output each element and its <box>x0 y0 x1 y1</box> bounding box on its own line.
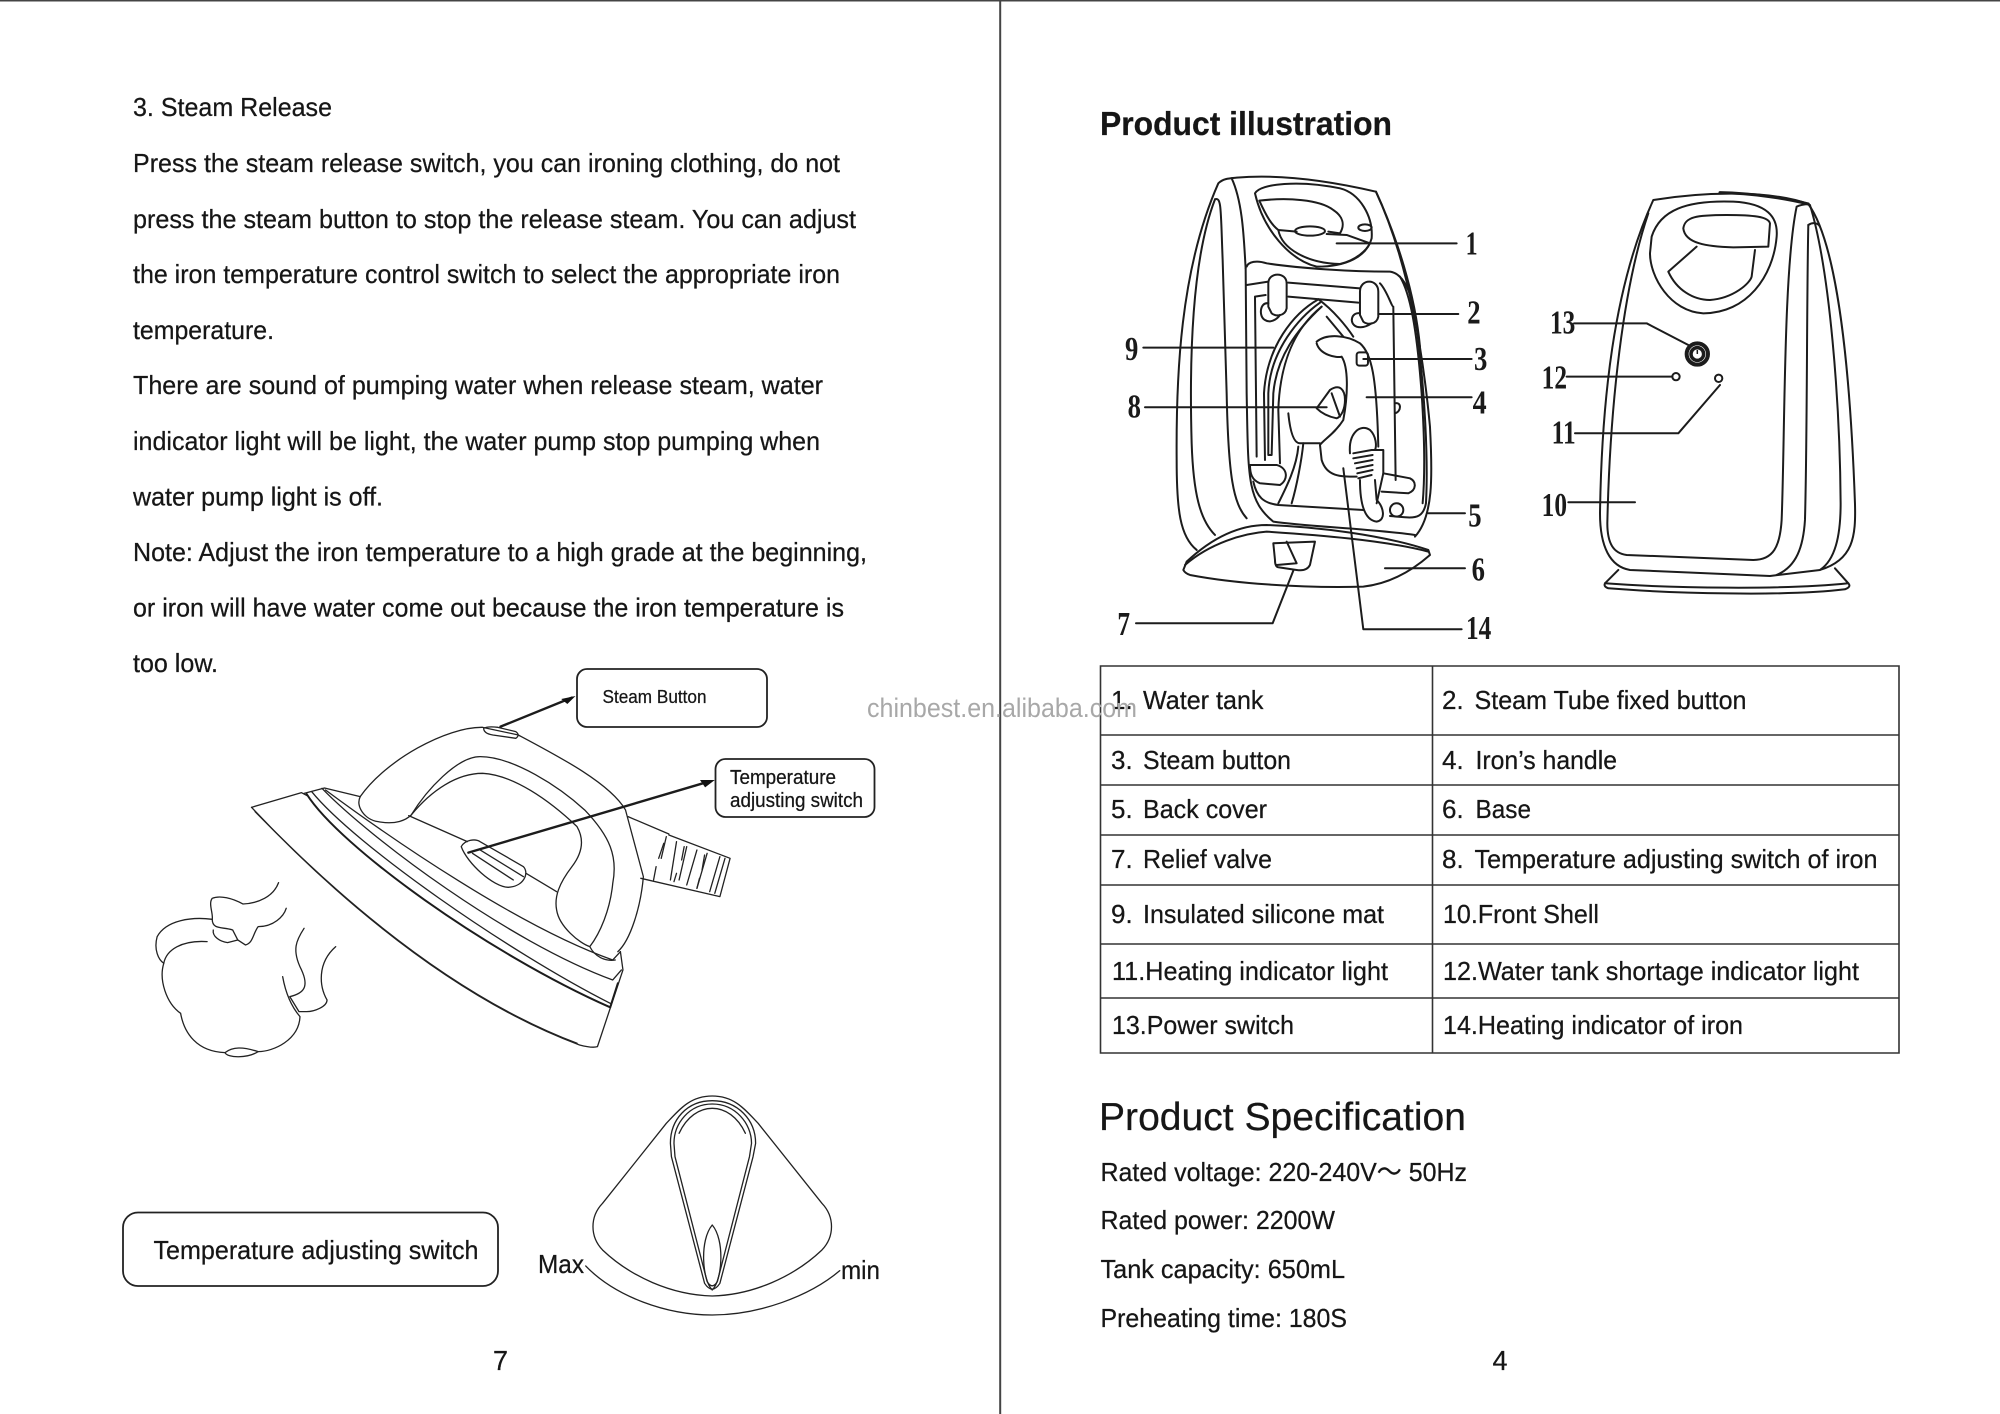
text block: steam release instructions: water pump light is off. <box>132 482 383 512</box>
table: parts list <box>1100 666 1899 1053</box>
table entries: Insulated silicone mat <box>1143 899 1385 929</box>
table entries: 2. <box>1442 685 1464 715</box>
leader lines <box>1567 323 1720 502</box>
table entries: Iron’s handle <box>1476 745 1617 775</box>
part numbers <box>1117 225 1492 647</box>
table entries: Steam Tube fixed button <box>1474 685 1746 715</box>
part numbers <box>1542 304 1576 524</box>
iron handle and body <box>359 727 643 960</box>
leader lines <box>1136 243 1472 629</box>
table entries: 11.Heating indicator light <box>1112 956 1389 986</box>
base and relief valve <box>1183 525 1430 587</box>
part numbers: 7 <box>1117 606 1130 643</box>
table entries: 13.Power switch <box>1112 1010 1294 1040</box>
part numbers: 1 <box>1466 225 1478 262</box>
main body shell <box>1177 177 1431 550</box>
page number 7: 7 <box>493 1345 508 1376</box>
illustration: steam station, front view <box>1542 193 1855 594</box>
part numbers: 3 <box>1474 341 1487 378</box>
illustration: steam station, inside view <box>1117 177 1492 647</box>
text block: specification values: Rated power: 2200W <box>1100 1205 1335 1235</box>
table entries: 14.Heating indicator of iron <box>1443 1010 1743 1040</box>
silicone mat and iron <box>1264 299 1383 522</box>
text block: steam release instructions: temperature. <box>133 315 274 345</box>
table entries: 3. <box>1111 745 1133 775</box>
heading: product illustration: Product illustration <box>1100 105 1392 142</box>
table entries <box>1111 685 1878 1040</box>
table entries: 8. <box>1442 844 1464 874</box>
heading: product specification: Product Specification <box>1099 1096 1466 1139</box>
max label: Max <box>538 1249 584 1279</box>
part numbers: 14 <box>1466 610 1492 647</box>
table entries: Relief valve <box>1143 844 1272 874</box>
table entries: Temperature adjusting switch of iron <box>1474 844 1878 874</box>
text block: steam release instructions: Press the steam release switch, you can ironing clothing, do not <box>133 148 841 178</box>
text block: steam release instructions: too low. <box>133 648 218 678</box>
part numbers: 5 <box>1468 498 1482 535</box>
watermark: chinbest.en.alibaba.com <box>867 693 1137 723</box>
text block: steam release instructions: Note: Adjust the iron temperature to a high grade at the beginning, <box>133 537 867 567</box>
part numbers: 13 <box>1550 304 1575 341</box>
part numbers: 4 <box>1473 384 1487 421</box>
dial drawing <box>586 1096 840 1315</box>
min label: min <box>841 1255 880 1285</box>
label box: temperature adjusting switch <box>123 1212 498 1286</box>
tube buttons and recess <box>1247 275 1415 517</box>
part numbers: 2 <box>1467 294 1481 331</box>
table entries: Water tank <box>1143 685 1264 715</box>
steam cloud <box>156 883 336 1057</box>
text block: specification values: Rated voltage: 220-240V～ 50Hz <box>1100 1157 1467 1187</box>
label box: temperature adjusting switch: Temperature adjusting switch <box>154 1235 478 1265</box>
water tank <box>1255 184 1372 267</box>
callout: steam button <box>577 669 767 727</box>
table entries: Steam button <box>1143 745 1291 775</box>
illustration: iron releasing steam <box>156 696 730 1057</box>
power cord sleeve <box>628 817 730 897</box>
part numbers: 12 <box>1542 359 1567 396</box>
part numbers: 10 <box>1542 487 1567 524</box>
table entries: 10.Front Shell <box>1443 899 1599 929</box>
text block: steam release instructions: 3. Steam Release <box>133 92 332 122</box>
text block: specification values <box>1100 1157 1467 1333</box>
power switch <box>1687 343 1708 365</box>
part numbers: 8 <box>1128 388 1141 425</box>
callout: temperature adjusting switch: Temperature <box>730 767 836 789</box>
table entries: 9. <box>1111 899 1133 929</box>
part numbers: 11 <box>1552 414 1576 451</box>
table entries: 5. <box>1111 794 1133 824</box>
text block: steam release instructions: press the steam button to stop the release steam. You can adjust <box>133 204 857 234</box>
water tank window <box>1650 201 1777 313</box>
table entries: Back cover <box>1143 794 1267 824</box>
text block: steam release instructions: or iron will have water come out because the iron temperature is <box>133 592 844 622</box>
text block: specification values: Tank capacity: 650mL <box>1100 1254 1345 1284</box>
body shell <box>1600 193 1855 576</box>
table entries: Base <box>1476 794 1531 824</box>
indicator lights <box>1672 373 1722 382</box>
callout: steam button: Steam Button <box>602 687 706 707</box>
steam button on handle <box>484 727 518 738</box>
table entries: 6. <box>1442 794 1464 824</box>
iron soleplate <box>252 788 623 1047</box>
part numbers: 9 <box>1125 331 1138 368</box>
table entries: 4. <box>1442 745 1464 775</box>
diagram: temperature dial with max and min <box>538 1096 880 1315</box>
part numbers: 6 <box>1472 552 1485 589</box>
callout: temperature adjusting switch: adjusting switch <box>730 790 863 812</box>
page number 4: 4 <box>1492 1345 1508 1376</box>
text block: steam release instructions: There are sound of pumping water when release steam, water <box>133 370 823 400</box>
text block: steam release instructions <box>132 92 867 678</box>
callout: temperature adjusting switch <box>716 759 874 817</box>
base <box>1605 568 1849 594</box>
arrow to temperature switch <box>468 780 715 853</box>
temperature dial on iron <box>461 840 526 887</box>
text block: steam release instructions: indicator light will be light, the water pump stop pumping when <box>133 426 820 456</box>
table entries: 1. <box>1111 685 1133 715</box>
text block: steam release instructions: the iron temperature control switch to select the appropriate iron <box>133 259 840 289</box>
table entries: 12.Water tank shortage indicator light <box>1443 956 1860 986</box>
table entries: 7. <box>1111 844 1133 874</box>
text block: specification values: Preheating time: 180S <box>1100 1303 1347 1333</box>
table grid <box>1100 666 1899 1053</box>
arrow to steam button <box>501 696 576 727</box>
